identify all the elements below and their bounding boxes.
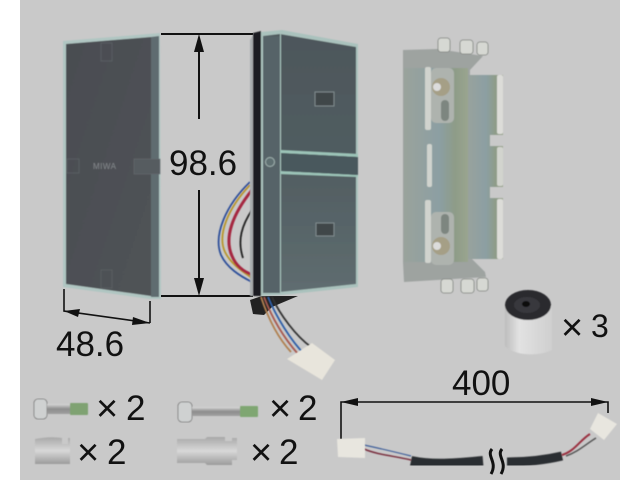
quantity: long screw x2: × <box>269 388 291 430</box>
device bracket tab <box>250 296 298 315</box>
dimension: height 98.6 <box>161 33 253 297</box>
quantity: tape x3: 3 <box>591 308 609 344</box>
connector: device harness plug <box>287 343 335 380</box>
dimension: height 98.6: 98.6 <box>169 144 237 183</box>
long spacer <box>177 437 237 465</box>
panel: device body <box>250 30 358 296</box>
quantity: short spacer x2: 2 <box>107 433 126 472</box>
quantity: long spacer x2 <box>250 432 298 474</box>
panel: front cover <box>63 33 161 299</box>
quantity: tape x3: × <box>561 307 583 349</box>
quantity: short spacer x2: × <box>77 432 99 474</box>
quantity: tape x3 <box>561 307 609 349</box>
logo: MIWA <box>93 162 117 171</box>
extension cable <box>337 413 617 474</box>
cable break mark <box>490 449 503 474</box>
dimension: width 48.6: 48.6 <box>56 325 124 364</box>
mounting bracket <box>403 38 504 293</box>
quantity: short screw x2: 2 <box>126 389 145 428</box>
quantity: long screw x2: 2 <box>298 389 317 428</box>
short spacer <box>35 437 70 464</box>
quantity: long screw x2 <box>269 388 317 430</box>
quantity: long spacer x2: × <box>250 432 272 474</box>
long screw <box>178 402 258 422</box>
dimension: width 48.6 <box>56 289 150 364</box>
quantity: short screw x2: × <box>96 388 118 430</box>
short screw <box>34 399 88 419</box>
dimension: cable length 400: 400 <box>452 364 510 403</box>
quantity: long spacer x2: 2 <box>279 433 298 472</box>
quantity: short spacer x2 <box>77 432 126 474</box>
quantity: short screw x2 <box>96 388 145 430</box>
wires: device harness <box>219 182 311 356</box>
dimension: cable length 400 <box>341 364 608 439</box>
tape roll <box>505 290 552 354</box>
